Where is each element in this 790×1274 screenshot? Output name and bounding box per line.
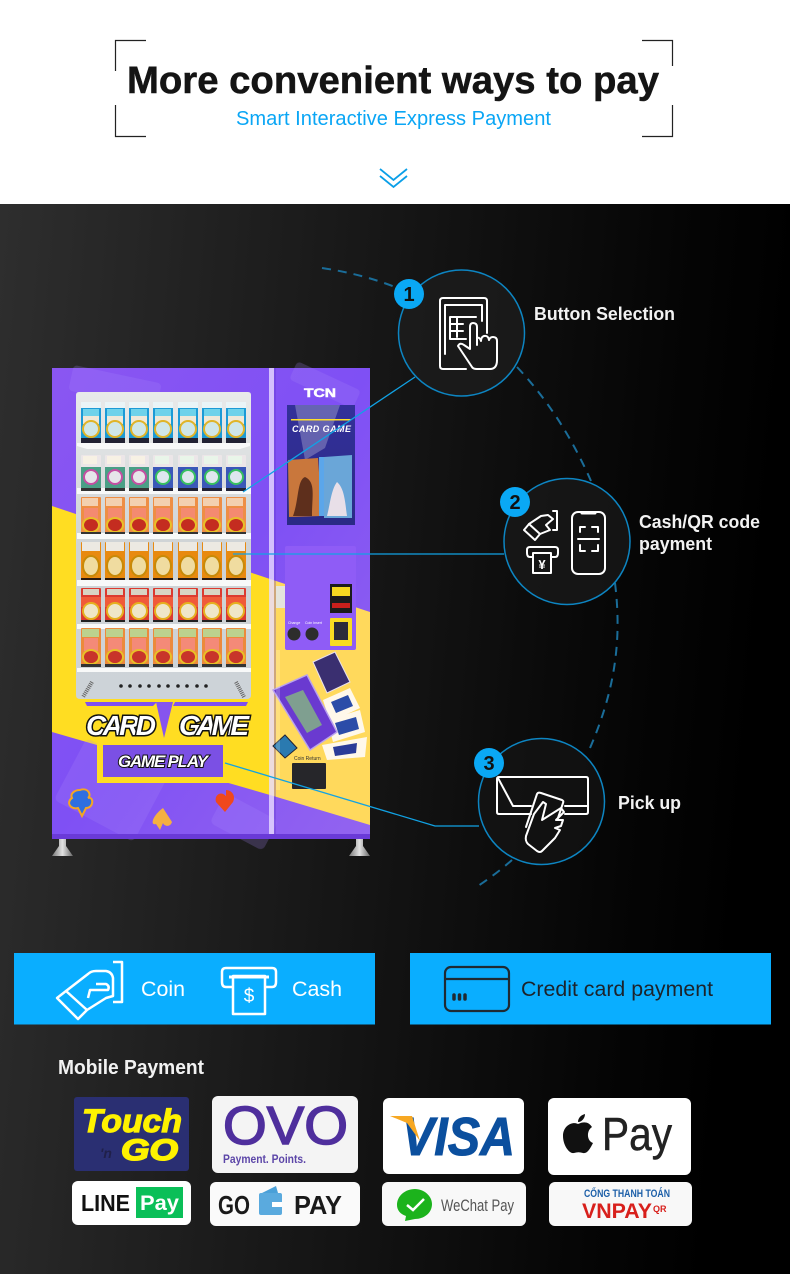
logo: Apple Pay: Pay — [602, 1108, 672, 1160]
icon: dollar sign: $ — [244, 986, 255, 1007]
machine body — [52, 368, 370, 839]
subtitle: Smart Interactive Express Payment — [236, 108, 551, 130]
step 2 circle — [504, 478, 630, 604]
icon: cash and QR phone — [524, 511, 605, 574]
badge 3 — [474, 748, 504, 778]
round buttons — [288, 628, 300, 640]
logo: OVO — [212, 1096, 358, 1173]
panel: coin and cash — [14, 953, 375, 1024]
icon: apple — [563, 1114, 593, 1153]
game play sign — [97, 738, 230, 783]
icon: wallet — [259, 1186, 282, 1215]
card game banner: GAME — [179, 710, 250, 741]
panel: credit card — [410, 953, 771, 1024]
machine legs — [52, 839, 370, 856]
right door yellow band — [270, 579, 370, 825]
step 1 circle — [398, 270, 524, 396]
heading: mobile payment: Mobile Payment — [58, 1057, 204, 1079]
logo: LINE Pay: LINE — [81, 1190, 130, 1216]
white header background — [0, 0, 790, 204]
logo: VISA: VISA — [402, 1107, 515, 1167]
logo: WeChat Pay — [382, 1182, 526, 1226]
icon: yen sign: ¥ — [538, 557, 546, 572]
logo: VNPay — [549, 1182, 692, 1226]
logo: Touch n Go — [74, 1097, 189, 1171]
coin slot plate — [276, 586, 285, 608]
game play sign: GAME PLAY — [118, 752, 210, 771]
badge 2 — [500, 487, 530, 517]
card reader — [330, 618, 352, 646]
screen card right — [324, 455, 352, 518]
coin return — [292, 756, 326, 789]
step 1 — [394, 270, 675, 396]
icon: cash slot — [222, 968, 276, 1014]
step 3 circle — [478, 738, 604, 864]
card game banner — [85, 702, 250, 741]
label: button selection: Button Selection — [534, 304, 675, 324]
suit icons — [69, 789, 234, 830]
logo: Touch n Go: Touch — [82, 1103, 182, 1139]
logo: Touch n Go: 'n — [100, 1145, 112, 1161]
step 3 — [474, 738, 681, 864]
logo: GoPay: GO — [218, 1190, 250, 1220]
icon: down chevrons — [380, 169, 407, 187]
vending machine — [52, 361, 370, 856]
delivery slot dots — [119, 684, 208, 688]
label: cash/QR code payment — [639, 512, 760, 554]
TCN logo: TCN — [304, 386, 336, 400]
badge 1 — [394, 279, 424, 309]
logo: LINE Pay: Pay — [140, 1192, 179, 1215]
dashed arc connecting steps — [322, 268, 618, 888]
logo: LINE Pay — [72, 1181, 191, 1225]
label: pick up: Pick up — [618, 793, 681, 813]
vent grilles — [83, 682, 244, 697]
product row 5 — [81, 588, 246, 622]
cash label: Cash — [292, 978, 342, 1001]
product row 4 — [81, 542, 246, 580]
faint decorative cards — [54, 361, 361, 851]
bill acceptor — [330, 584, 352, 613]
product row 2 — [81, 455, 246, 491]
icon: wechat check — [397, 1189, 432, 1221]
logo: OVO: Payment. Points. — [223, 1152, 306, 1166]
leader lines — [225, 377, 504, 826]
logo: VNPay: CỔNG THANH TOÁN — [584, 1187, 670, 1200]
product row 6 — [81, 628, 246, 667]
icon: coin hand — [57, 962, 122, 1019]
icon: credit card — [445, 967, 509, 1011]
label: cash/QR code payment: payment — [639, 534, 712, 554]
shelves — [77, 443, 251, 672]
payment panel — [276, 546, 356, 650]
title frame brackets — [116, 40, 672, 136]
product art: card deck — [273, 652, 367, 760]
screen card left — [288, 458, 322, 517]
product window — [76, 392, 251, 699]
machine touch screen: CARD GAME — [292, 424, 352, 434]
payment panel: Change — [288, 621, 300, 625]
machine touch screen — [287, 405, 355, 525]
logo: Apple Pay — [548, 1098, 691, 1175]
product row 1 — [81, 402, 246, 443]
title: More convenient ways to pay — [127, 60, 659, 102]
payment panel: Coin Insert — [305, 621, 322, 625]
yellow diagonal band — [52, 506, 270, 795]
badge 2: 2 — [509, 492, 521, 514]
base strip — [52, 834, 370, 839]
coin return: Coin Return — [294, 756, 321, 762]
logo: VNPay: VNPAY — [582, 1200, 652, 1223]
logo: VNPay: QR — [653, 1204, 667, 1214]
card game banner: CARD — [86, 710, 156, 741]
logo: GoPay: PAY — [294, 1190, 342, 1220]
icon: tablet with pointing hand — [440, 298, 497, 369]
coin label: Coin — [141, 978, 185, 1001]
credit card label: Credit card payment — [521, 978, 713, 1001]
product row 3 — [81, 497, 246, 534]
badge 1: 1 — [403, 284, 415, 306]
logo: Touch n Go: GO — [121, 1134, 178, 1167]
door divider — [269, 368, 276, 839]
icon: pick up hand — [497, 777, 588, 852]
logo: WeChat Pay: WeChat Pay — [441, 1196, 514, 1215]
logo: VISA — [383, 1098, 524, 1174]
step 2 — [500, 478, 760, 604]
logo: GoPay — [210, 1182, 360, 1226]
logo: OVO: OVO — [223, 1096, 348, 1156]
side door yellow highlight — [276, 650, 280, 790]
label: cash/QR code payment: Cash/QR code — [639, 512, 760, 532]
badge 3: 3 — [483, 753, 495, 775]
